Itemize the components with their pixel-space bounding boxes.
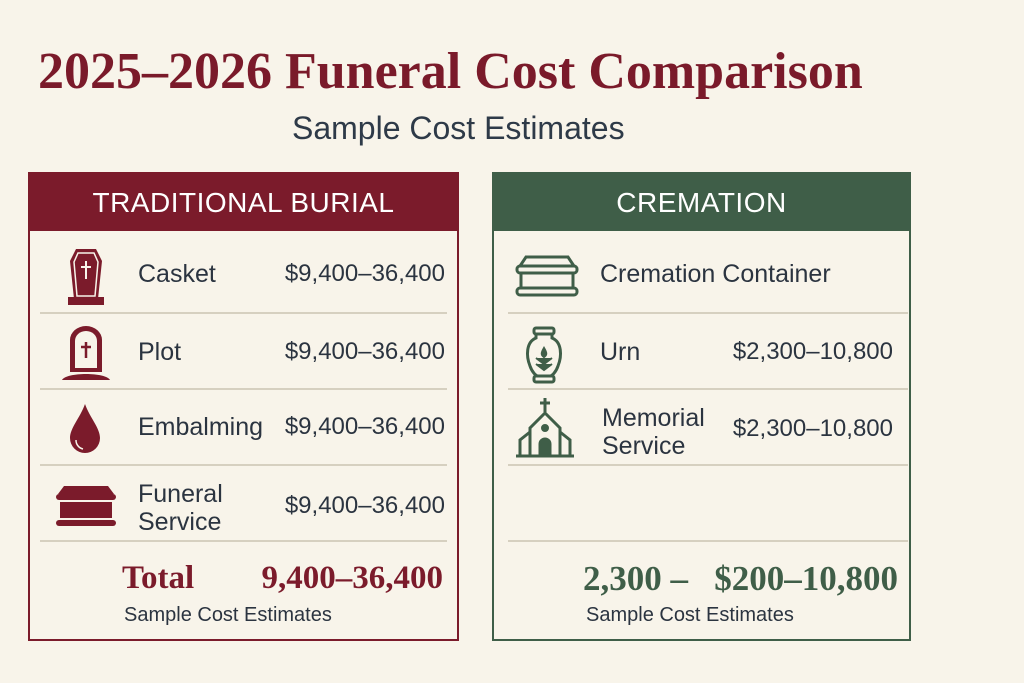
text: memorial service xyxy=(602,404,705,460)
panel: traditional burial: $9,400–36,400 xyxy=(285,413,445,440)
icon: church xyxy=(516,398,574,458)
heading: traditional burial xyxy=(30,174,457,231)
text: funeral service xyxy=(138,480,223,536)
panel: cremation: $2,300–10,800 xyxy=(733,338,893,365)
icon: funeral casket xyxy=(56,486,116,526)
total: Total xyxy=(122,560,194,596)
panel: traditional burial: 9,400–36,400 xyxy=(262,560,443,596)
icon: container xyxy=(516,256,578,296)
text: plot: Plot xyxy=(138,338,181,366)
text: memorial service: Service xyxy=(602,432,685,460)
text: casket: Casket xyxy=(138,260,216,288)
note: Sample Cost Estimates xyxy=(124,604,332,626)
text: memorial service: Memorial xyxy=(602,404,705,432)
icon: plot xyxy=(62,326,110,380)
text: funeral service: Service xyxy=(138,508,221,536)
icon: drop xyxy=(70,404,100,453)
total: 2,300 – $200–10,800 xyxy=(583,559,898,598)
panel: traditional burial xyxy=(28,172,459,641)
subtitle: Sample Cost Estimates xyxy=(292,110,625,146)
panel: cremation xyxy=(492,172,911,641)
note: Sample Cost Estimates xyxy=(586,604,794,626)
text: cremation container: Cremation Container xyxy=(600,260,831,288)
text: embalming: Embalming xyxy=(138,413,263,441)
heading: cremation xyxy=(494,174,909,231)
panel: traditional burial: $9,400–36,400 xyxy=(285,338,445,365)
heading: traditional burial: TRADITIONAL BURIAL xyxy=(92,187,394,218)
text: urn: Urn xyxy=(600,338,640,366)
panel: traditional burial: $9,400–36,400 xyxy=(285,260,445,287)
heading: cremation: CREMATION xyxy=(616,187,787,218)
panel: traditional burial: $9,400–36,400 xyxy=(285,492,445,519)
icon: casket xyxy=(68,249,104,305)
icon: urn xyxy=(526,326,562,384)
text: funeral service: Funeral xyxy=(138,480,223,508)
panel: cremation: $2,300–10,800 xyxy=(733,415,893,442)
title: 2025–2026 Funeral Cost Comparison xyxy=(38,43,863,100)
